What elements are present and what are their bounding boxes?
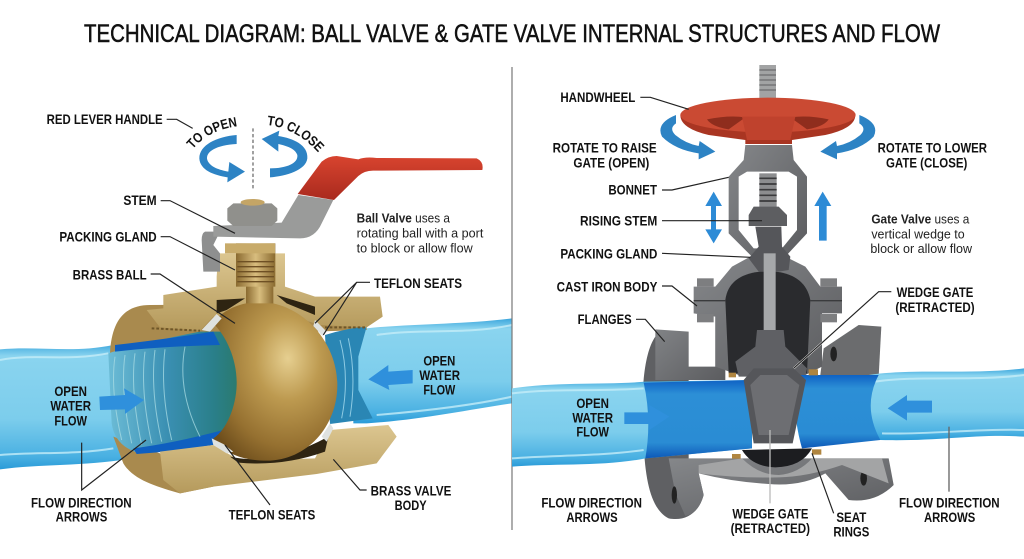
label: flow direction arrows left	[541, 495, 642, 525]
bonnet and main body	[694, 257, 842, 375]
label: seat rings	[812, 453, 869, 540]
label: teflon seats bottom: TEFLON SEATS	[229, 507, 315, 522]
yoke	[729, 145, 807, 257]
left threaded bore	[108, 332, 242, 454]
label: rotate to lower gate	[878, 141, 987, 170]
label: stem	[123, 193, 235, 233]
label: open water flow right: OPEN	[423, 353, 455, 368]
description: ball valve	[357, 212, 484, 256]
label: rotate to raise gate	[553, 141, 657, 170]
lower cavity	[742, 448, 812, 467]
label: flow direction arrows right: ARROWS	[924, 510, 975, 525]
double arrow: gate travel	[705, 192, 722, 243]
water streaks	[512, 375, 1024, 458]
left flange face top	[655, 317, 725, 380]
water stream: left inlet	[0, 343, 140, 469]
lower cut face	[699, 458, 889, 483]
label: brass ball: BRASS BALL	[73, 267, 147, 282]
label: brass valve body: BRASS VALVE	[371, 483, 451, 498]
label: flow direction arrows: FLOW DIRECTION	[31, 495, 132, 510]
label: flow direction arrows: ARROWS	[56, 510, 107, 525]
right flange hole	[830, 347, 837, 361]
label: to open: TO OPEN	[186, 117, 237, 148]
flange joint line	[694, 299, 842, 303]
hex nut	[227, 203, 277, 226]
label: brass valve body	[333, 459, 451, 513]
panel divider	[511, 67, 513, 530]
label: teflon seats top: TEFLON SEATS	[374, 276, 462, 291]
brass body: top cut face	[147, 253, 383, 331]
label: flow direction arrows right	[899, 427, 1000, 525]
flow arrow: right	[888, 395, 932, 421]
label: flanges	[578, 312, 665, 342]
label: wedge gate upper: WEDGE GATE	[897, 285, 973, 300]
label: flanges: FLANGES	[578, 312, 632, 327]
label: rising stem: RISING STEM	[580, 213, 657, 228]
wedge top collar	[735, 330, 807, 377]
rotation arrow: to open	[199, 135, 245, 182]
water stream: right	[869, 368, 1024, 440]
rotation arrow: to close	[262, 131, 307, 177]
packing gland threads	[225, 243, 275, 287]
threaded stem	[759, 173, 777, 208]
flow arrow: left	[99, 388, 144, 414]
label: teflon seats top	[315, 276, 462, 335]
label: flow direction arrows right: FLOW DIRECTION	[899, 495, 1000, 510]
label: cast iron body: CAST IRON BODY	[557, 279, 657, 294]
water streaks	[0, 325, 512, 455]
label: open water flow right	[419, 353, 460, 398]
lower flange hole	[672, 486, 677, 504]
label: rotate to lower gate: ROTATE TO LOWER	[878, 141, 987, 156]
flow arrow: right	[368, 365, 413, 390]
label: open water flow left: FLOW	[54, 413, 87, 428]
label: packing gland	[59, 230, 235, 270]
label: brass ball	[73, 267, 235, 323]
right threaded bore	[325, 327, 373, 424]
rotation arrow: raise	[660, 115, 715, 159]
brass body: bottom cut face	[160, 425, 397, 493]
handwheel	[680, 98, 856, 144]
flow arrow: left	[624, 405, 669, 430]
label: bonnet: BONNET	[608, 183, 658, 198]
panel: ball valve	[0, 112, 512, 525]
lower body	[669, 458, 894, 516]
stem neck	[246, 280, 273, 313]
rotation arrow: lower	[820, 115, 875, 159]
description: gate valve: vertical wedge to	[871, 227, 965, 241]
label: wedge gate lower	[731, 430, 810, 536]
label: open water flow	[572, 396, 613, 440]
water inside body: right	[794, 375, 880, 448]
label: flow direction arrows left: FLOW DIRECTION	[541, 495, 642, 510]
label: seat rings: RINGS	[833, 525, 869, 540]
label: flow direction arrows	[31, 440, 146, 525]
label: bonnet	[608, 177, 729, 198]
description: ball valve: to block or allow flow	[357, 242, 474, 256]
water inside body: left	[644, 380, 752, 458]
lever hook	[202, 232, 220, 272]
label: wedge gate upper: (RETRACTED)	[895, 300, 975, 315]
body thread edge	[152, 327, 367, 331]
body interior cavity	[725, 272, 810, 373]
label: open water flow: OPEN	[576, 396, 609, 411]
stem nut	[749, 207, 787, 226]
lever steel arm	[213, 195, 333, 238]
label: rotate to lower gate: GATE (CLOSE)	[886, 155, 967, 170]
red lever grip	[298, 156, 483, 200]
label: packing gland: PACKING GLAND	[560, 246, 657, 261]
label: seat rings: SEAT	[836, 510, 867, 525]
label: open water flow right: FLOW	[423, 383, 455, 398]
label: open water flow left: OPEN	[54, 384, 87, 399]
label: open water flow left	[50, 384, 91, 428]
label: red lever handle: RED LEVER HANDLE	[47, 112, 163, 127]
description: ball valve: Ball Valve uses a	[357, 212, 451, 226]
label: handwheel: HANDWHEEL	[560, 90, 635, 105]
teflon seats	[202, 314, 333, 453]
packing gland	[749, 227, 790, 272]
label: open water flow: FLOW	[576, 425, 609, 440]
description: ball valve: rotating ball with a port	[357, 227, 484, 241]
wedge gate	[744, 368, 806, 443]
label: to close: TO CLOSE	[268, 116, 324, 152]
ball inner dark gap	[230, 437, 328, 464]
label: wedge gate lower: WEDGE GATE	[732, 506, 808, 521]
brass ball	[213, 303, 337, 461]
description: gate valve: Gate Valve uses a	[871, 212, 970, 226]
flange bolts	[697, 278, 837, 322]
water stream: right outlet	[353, 318, 512, 423]
left flange rear	[642, 337, 704, 519]
stem rod	[764, 253, 776, 332]
dark cavity crescent	[217, 295, 315, 315]
description: gate valve	[870, 212, 973, 256]
up arrow	[814, 192, 831, 241]
label: wedge gate upper	[794, 285, 975, 368]
description: gate valve: block or allow flow	[870, 242, 973, 256]
axis dashed line	[251, 128, 254, 189]
label: stem: STEM	[123, 193, 157, 208]
stem top	[241, 199, 265, 206]
brass body: rear shell	[110, 303, 367, 493]
label: wedge gate lower: (RETRACTED)	[731, 521, 810, 536]
label: open water flow: WATER	[572, 411, 613, 426]
label: flow direction arrows left: ARROWS	[566, 510, 618, 525]
label: handwheel	[560, 90, 689, 109]
label: cast iron body	[557, 279, 697, 306]
label: packing gland	[560, 246, 750, 261]
label: rotate to raise gate: GATE (OPEN)	[573, 155, 649, 170]
lower right flange hole	[860, 471, 867, 486]
label: teflon seats bottom	[225, 445, 315, 522]
water stream: left	[512, 380, 752, 467]
seat rings	[729, 369, 821, 459]
right flange	[820, 325, 881, 377]
label: rotate to raise gate: ROTATE TO RAISE	[553, 141, 657, 156]
label: brass valve body: BODY	[395, 498, 427, 513]
label: packing gland: PACKING GLAND	[59, 230, 157, 245]
label: open water flow left: WATER	[50, 399, 91, 414]
panel: gate valve	[512, 65, 1024, 540]
top stud	[759, 65, 776, 98]
label: open water flow right: WATER	[419, 368, 460, 383]
